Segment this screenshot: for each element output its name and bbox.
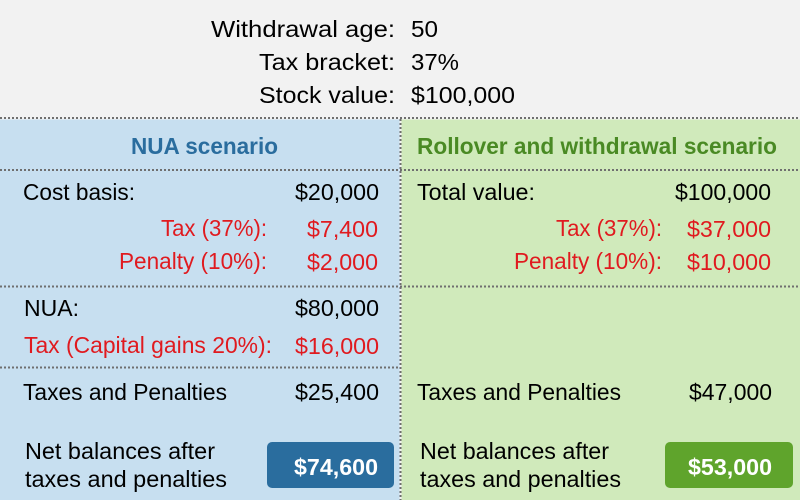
NUA rows: [24, 295, 379, 359]
header: assumptions: Withdrawal age:: [211, 16, 395, 42]
taxes and penalties total: $47,000: [689, 379, 772, 405]
NUA rows: $16,000: [295, 333, 379, 359]
cost basis rows: $20,000: [295, 179, 379, 205]
header: assumptions: Tax bracket:: [259, 49, 395, 75]
NUA rows: $80,000: [295, 295, 379, 321]
header: assumptions: 37%: [411, 49, 459, 75]
net balance label: [25, 438, 227, 492]
net balance label: taxes and penalties: [25, 466, 227, 492]
net balance badge: [267, 442, 394, 488]
taxes and penalties total: [23, 379, 379, 405]
net balance label: taxes and penalties: [420, 466, 621, 492]
total value rows: [417, 179, 771, 275]
taxes and penalties total: Taxes and Penalties: [23, 379, 227, 405]
total value rows: $100,000: [675, 179, 771, 205]
heading: NUA scenario: NUA scenario: [131, 133, 278, 159]
total value rows: $37,000: [687, 216, 771, 242]
net balance label: Net balances after: [420, 438, 609, 464]
cost basis rows: Penalty (10%):: [119, 248, 267, 274]
cost basis rows: [23, 179, 379, 275]
total value rows: $10,000: [687, 249, 771, 275]
header: assumptions: Stock value:: [259, 82, 395, 108]
header: assumptions: [211, 16, 515, 108]
heading: rollover scenario: Rollover and withdrawal scenario: [417, 133, 777, 159]
net balance label: Net balances after: [25, 438, 215, 464]
panel: NUA scenario: [0, 120, 400, 500]
taxes and penalties total: $25,400: [295, 379, 379, 405]
panel: rollover and withdrawal scenario: [402, 120, 800, 500]
cost basis rows: $2,000: [307, 249, 378, 275]
cost basis rows: Tax (37%):: [161, 215, 267, 241]
net balance badge: [665, 442, 793, 488]
total value rows: Penalty (10%):: [514, 248, 662, 274]
net balance badge: $53,000: [688, 454, 772, 480]
cost basis rows: Cost basis:: [23, 179, 135, 205]
header: assumptions: $100,000: [411, 82, 515, 108]
total value rows: Total value:: [417, 179, 535, 205]
total value rows: Tax (37%):: [556, 215, 662, 241]
cost basis rows: $7,400: [307, 216, 378, 242]
net balance label: [420, 438, 621, 492]
taxes and penalties total: Taxes and Penalties: [417, 379, 621, 405]
NUA rows: Tax (Capital gains 20%):: [24, 332, 272, 358]
NUA rows: NUA:: [24, 295, 79, 321]
net balance badge: $74,600: [294, 454, 378, 480]
header: assumptions: 50: [411, 16, 438, 42]
taxes and penalties total: [417, 379, 772, 405]
